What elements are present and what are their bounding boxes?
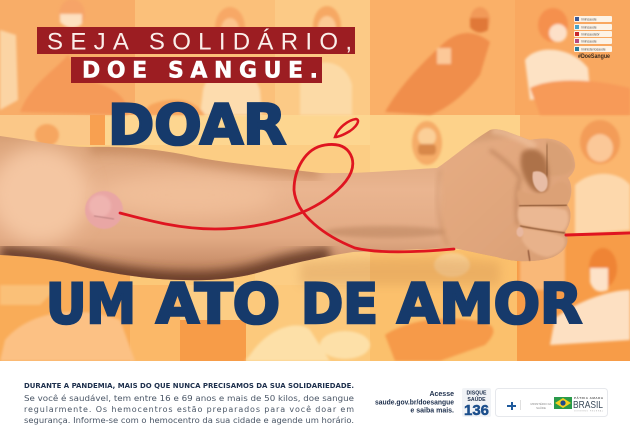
thumb [521,149,549,194]
footer text block: DURANTE A PANDEMIA, MAIS DO QUE NUNCA PRECISAMOS DA SUA SOLIDARIEDADE. [24,381,354,390]
social media list: #DoeSangue [578,54,611,60]
banner: doe sangue: DOE SANGUE. [82,58,318,84]
heading: um ato de amor: ATO [156,272,280,336]
SUS mark [507,402,516,410]
website text: Acesse [429,391,454,398]
red tube [120,119,630,252]
upper edge tan [90,147,320,173]
fist fingers [516,140,574,261]
finger 3 [522,228,565,257]
wrist crease [438,170,448,246]
footer text block [24,381,354,425]
website text [375,391,454,414]
palm crease [490,150,520,225]
index knuckle [546,140,574,176]
social media list: /ministeriosaude [581,48,606,52]
social media list: /minsaude [581,18,597,22]
disque saúde 136: DISQUE [467,390,487,396]
banner: seja solidário: SEJA SOLIDÁRIO, [47,28,352,56]
social media list: /minsaudebr [581,32,601,36]
social media list: /minsaude [581,26,597,30]
heading: um ato de amor [46,272,582,336]
heading: um ato de amor: DE [301,272,378,336]
footer text block: Se você é saudável, tem entre 16 e 69 anos e mais de 50 kilos, doe sangue [24,393,354,403]
government logos: BRASIL [573,400,603,411]
government logos: PÁTRIA AMADA [574,395,604,400]
disque saúde 136: SAÚDE [467,396,486,403]
government logos: GOVERNO FEDERAL [574,410,604,412]
footer text block: segurança. Informe-se com o hemocentro da sua cidade e agende um horário. [24,416,354,425]
arm shadow on background [300,258,500,285]
arm [0,120,600,280]
footer panel [0,361,630,444]
disque saúde 136 [462,388,491,419]
website text: saude.gov.br/doesangue [375,400,454,406]
heading: um ato de amor: UM [46,272,136,336]
government logos: SAÚDE [536,405,546,410]
lower edge shadow [0,254,330,280]
social media list [574,16,612,60]
government logos: MINISTÉRIO DA [531,401,552,406]
finger 2 [518,207,569,232]
disque saúde 136: 136 [464,402,489,419]
heading: doar: DOAR [108,93,286,157]
heading: um ato de amor: AMOR [397,272,582,336]
government logos [496,388,608,416]
finger 1 [517,182,570,205]
footer text block: regularmente. Os hemocentros estão preparados para você doar em [24,404,354,414]
website text: e saiba mais. [410,408,454,414]
flag [554,397,572,409]
social media list: /minsaude [581,40,597,44]
bandage patch [85,191,123,229]
